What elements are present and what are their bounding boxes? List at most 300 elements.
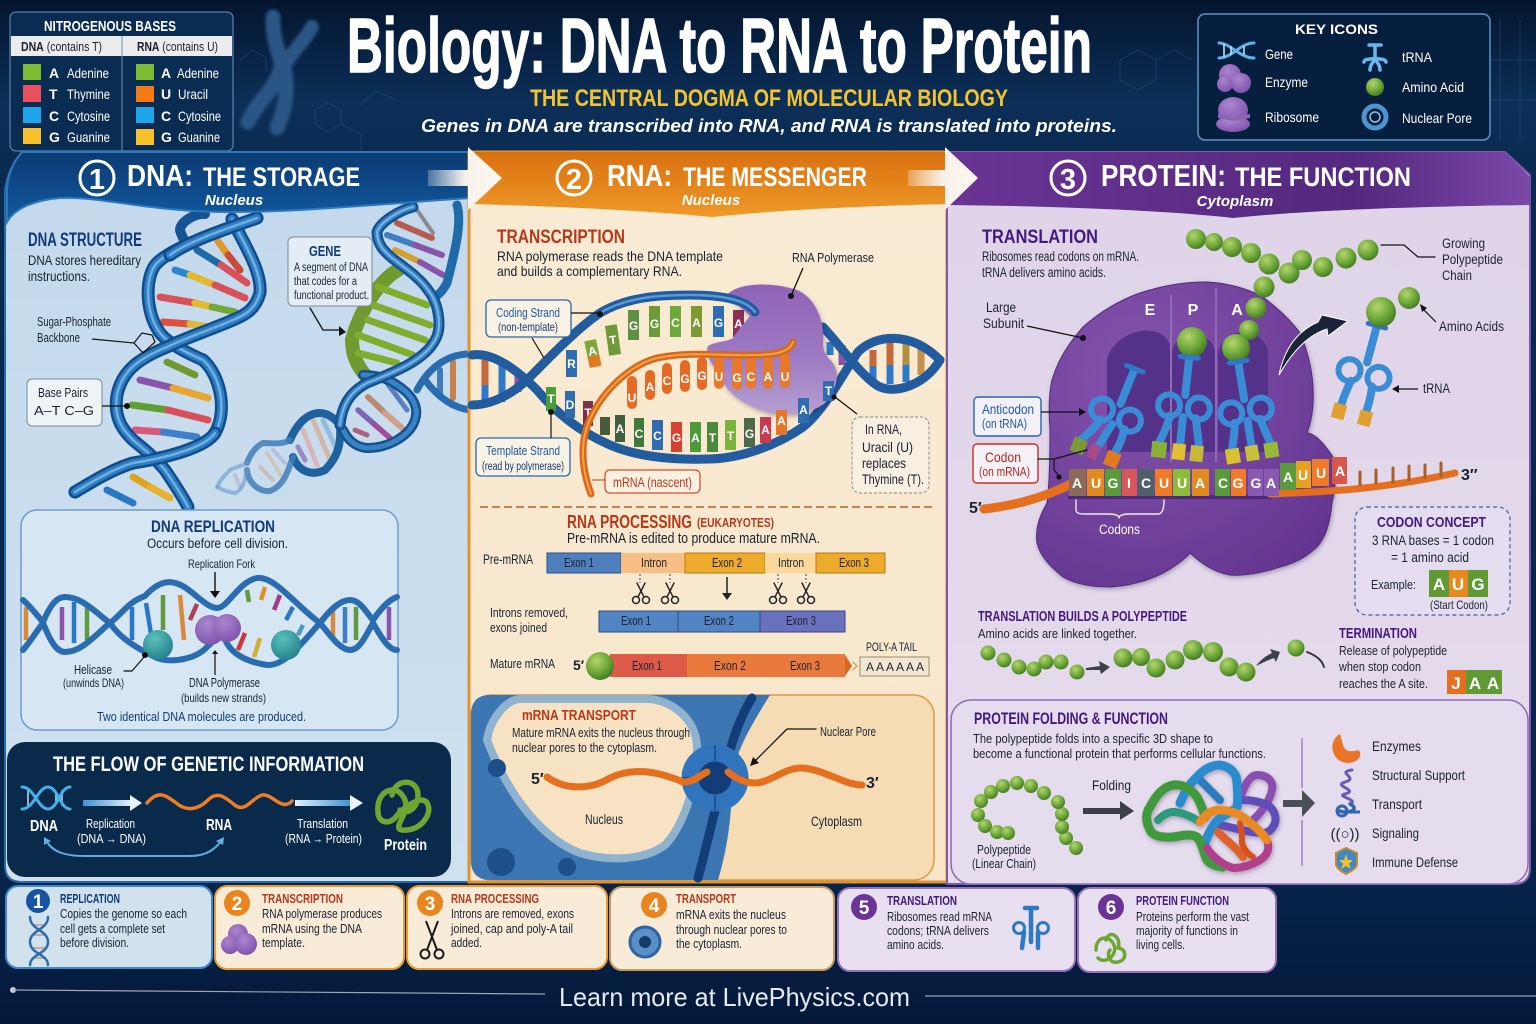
panel: mRNA transport: 5′: [531, 771, 544, 788]
label: growing polypeptide chain: Polypeptide: [1442, 252, 1503, 267]
lower lens strands: [217, 413, 343, 493]
nucleus interior: [487, 699, 697, 858]
card: translation: [838, 888, 1075, 971]
card: replication: Copies the genome so each: [60, 907, 187, 921]
free amino acids: [1366, 287, 1420, 327]
replication labels: Helicase: [74, 663, 112, 677]
card: translation: codons; tRNA delivers: [887, 924, 989, 938]
label: growing polypeptide chain: Growing: [1442, 236, 1485, 251]
callout: uracil replaces thymine: Uracil (U): [862, 439, 913, 455]
header: RNA the messenger: [557, 158, 867, 209]
icon: signaling: ((○)): [1330, 826, 1360, 843]
diagram: joined exons: Exon 2: [704, 614, 734, 628]
nascent RNA bases: U: [781, 370, 789, 384]
subtitle: THE CENTRAL DOGMA OF MOLECULAR BIOLOGY: [530, 85, 1008, 112]
mRNA with codon tiles: A: [1283, 469, 1293, 485]
panel: flow of genetic information: (DNA → DNA): [77, 832, 146, 846]
template strand bases: C: [635, 427, 644, 441]
panel: flow of genetic information: Replication: [86, 817, 135, 831]
panel: protein folding and function: Structural Support: [1372, 767, 1465, 783]
text: translation description: tRNA delivers amino acids.: [982, 265, 1106, 280]
panel: mRNA transport: 3′: [866, 775, 879, 792]
panel: RNA: [469, 152, 947, 882]
callout: template strand: (read by polymerase): [482, 461, 564, 473]
tagline: Genes in DNA are transcribed into RNA, and RNA is translated into proteins.: [421, 115, 1117, 136]
panel: DNA replication: Occurs before cell division.: [147, 536, 288, 551]
folded protein: [1147, 765, 1275, 868]
panel: flow of genetic information: [7, 742, 451, 877]
header: DNA the storage: THE STORAGE: [203, 162, 360, 192]
panel: mRNA transport: nuclear pores to the cytoplasm.: [512, 740, 657, 755]
callout: anticodon: Anticodon: [982, 402, 1034, 417]
text: termination: reaches the A site.: [1339, 676, 1428, 691]
icon: structural support: [1341, 770, 1352, 804]
callout: gene: A segment of DNA: [294, 262, 368, 274]
callout: uracil replaces thymine: In RNA,: [865, 421, 902, 437]
nascent RNA bases: G: [680, 372, 690, 386]
panel: nitrogenous bases: A: [49, 65, 59, 81]
panel: nitrogenous bases: T: [49, 86, 58, 102]
heading: DNA structure: DNA STRUCTURE: [28, 230, 142, 251]
ribosome sites: [1107, 330, 1268, 452]
card: protein function: PROTEIN FUNCTION: [1136, 894, 1229, 908]
strand lens 1: [343, 375, 416, 448]
template strand bases: T: [825, 384, 833, 398]
coding strand bases: G: [629, 319, 638, 333]
text: termination: A: [1469, 674, 1481, 693]
heading: transcription: TRANSCRIPTION: [497, 227, 625, 248]
panel: codon concept: U: [1452, 575, 1464, 594]
icon: DNA: [22, 787, 70, 809]
panel: protein folding and function: Enzymes: [1372, 738, 1421, 754]
mRNA with codon tiles: A: [1266, 475, 1276, 491]
callout: codon: [973, 444, 1087, 483]
nascent RNA bases: G: [732, 371, 742, 385]
panel: protein folding and function: [951, 700, 1528, 884]
nascent RNA bases: [627, 353, 790, 409]
label: RNA polymerase: RNA Polymerase: [792, 250, 874, 265]
diagram: joined exons: Introns removed,: [490, 605, 568, 620]
icon: nuclear pore: [682, 745, 748, 811]
panel: DNA replication: DNA REPLICATION: [151, 517, 275, 536]
panel: nitrogenous bases: Adenine: [67, 65, 109, 81]
mRNA with codon tiles: C: [1218, 475, 1228, 491]
panel 1 header band: [7, 152, 470, 222]
text: transcription description: and builds a complementary RNA.: [497, 263, 682, 279]
twist toward panel 2: [417, 354, 470, 410]
card: transcription: template.: [262, 936, 305, 950]
icon: chromosome: [248, 17, 312, 128]
text: amino acids linked: Amino acids are linked together.: [978, 626, 1137, 641]
card: RNA processing: joined, cap and poly-A tail: [450, 922, 573, 936]
header: DNA the storage: [80, 158, 360, 209]
label: codons bracket: [1076, 500, 1164, 537]
card: transcription: RNA polymerase produces: [262, 907, 382, 921]
card: protein function: living cells.: [1136, 938, 1185, 952]
coding strand bases: T: [608, 332, 618, 347]
diagram: pre-mRNA bar: Intron: [778, 556, 804, 570]
diagram: mature mRNA: Exon 3: [790, 658, 820, 673]
panel: nitrogenous bases: Thymine: [67, 86, 110, 102]
free tRNA: [1326, 319, 1402, 429]
text: transcription description: [497, 248, 723, 279]
panel: nitrogenous bases: DNA (contains T): [21, 39, 102, 54]
mRNA with codon tiles: [969, 457, 1478, 517]
tRNA at E site: [1069, 357, 1159, 471]
icon: immune defense shield: [1336, 848, 1357, 874]
panel: key icons: Enzyme: [1265, 74, 1308, 90]
mRNA with codon tiles: A: [1072, 475, 1082, 491]
decorative molecule lines: [240, 20, 1536, 150]
strand main: [340, 207, 439, 425]
header: DNA the storage: 1: [89, 164, 105, 196]
card: transport: the cytoplasm.: [676, 937, 742, 951]
panel: nitrogenous bases: Cytosine: [178, 108, 221, 124]
panel: codon concept: Example:: [1371, 577, 1416, 592]
diagram: mature mRNA: [490, 642, 929, 680]
coding strand bases: [566, 306, 744, 377]
left and right twist rungs: [485, 342, 921, 402]
heading: RNA processing: RNA PROCESSING: [567, 512, 692, 532]
text: termination: [1338, 626, 1502, 694]
label: large subunit: Subunit: [983, 316, 1024, 331]
nascent mRNA strand: [583, 342, 793, 494]
card: transport: 4: [649, 896, 660, 917]
diagram: mature mRNA: 5′: [573, 657, 585, 673]
panel 3 header band: [947, 152, 1531, 218]
panel: nitrogenous bases: C: [161, 108, 171, 124]
icon: amino acid: [1366, 78, 1384, 96]
replication labels: (unwinds DNA): [63, 676, 124, 690]
label: sugar-phosphate backbone: Sugar-Phosphate: [37, 314, 111, 329]
card: translation: Ribosomes read mRNA: [887, 910, 993, 924]
callout: uracil replaces thymine: replaces: [862, 455, 906, 471]
panel: protein: [947, 152, 1531, 884]
DNA helix left: [75, 214, 260, 507]
linear polypeptide: [971, 776, 1083, 855]
coding strand bases: R: [567, 357, 576, 371]
card: translation: amino acids.: [887, 938, 944, 952]
card: transcription: 2: [232, 894, 242, 915]
panel: flow of genetic information: DNA: [30, 818, 58, 835]
text: termination: TERMINATION: [1339, 626, 1417, 642]
panel: flow of genetic information: THE FLOW OF GENETIC INFORMATION: [53, 753, 364, 776]
panel: flow of genetic information: (RNA → Protein): [285, 832, 362, 846]
panel: nitrogenous bases: [10, 12, 233, 151]
nascent RNA bases: G: [697, 369, 707, 383]
mRNA with codon tiles: I: [1127, 475, 1131, 491]
nascent RNA bases: C: [747, 370, 756, 384]
callout: mRNA nascent: [592, 470, 700, 493]
callout: gene: functional product.: [294, 290, 369, 302]
label: codons bracket: Codons: [1099, 522, 1140, 537]
mRNA with codon tiles: U: [1159, 475, 1169, 491]
icon: nuclear pore: [1364, 106, 1386, 128]
panel: nitrogenous bases: G: [49, 129, 60, 145]
back strand loop: [180, 214, 205, 245]
diagram: mature mRNA: POLY-A TAIL: [866, 642, 917, 654]
panel: nitrogenous bases: G: [161, 129, 172, 145]
label: growing polypeptide chain: Chain: [1442, 268, 1472, 283]
text: termination: A: [1487, 674, 1499, 693]
label: amino acids: [1420, 304, 1504, 334]
callout: coding strand: (non-template): [498, 320, 558, 334]
mRNA with codon tiles: U: [1298, 467, 1308, 483]
callout: base pairs: A–T C–G: [34, 403, 94, 418]
icon: tRNA: [1364, 45, 1386, 70]
callout: uracil replaces thymine: Thymine (T).: [862, 471, 924, 487]
panel: key icons: Ribosome: [1265, 109, 1319, 125]
header: protein the function: PROTEIN:: [1101, 158, 1226, 193]
arrow: translation: [295, 795, 363, 811]
replication labels: [63, 650, 306, 724]
DNA strands: [472, 295, 940, 459]
icon: ribosome: [1216, 97, 1250, 132]
panel: nitrogenous bases: U: [161, 86, 171, 102]
panel: flow of genetic information: RNA: [206, 817, 232, 834]
diagram: pre-mRNA bar: Pre-mRNA: [483, 552, 533, 567]
helicase enzymes: [143, 630, 301, 660]
template strand bases: A: [691, 431, 700, 445]
text: translation description: Ribosomes read codons on mRNA.: [982, 249, 1139, 264]
mRNA with codon tiles: U: [1091, 475, 1101, 491]
mRNA with codon tiles: A: [1335, 463, 1345, 479]
panel: nitrogenous bases: Guanine: [67, 129, 110, 145]
panel 3 body: [947, 152, 1530, 884]
template strand bases: T: [584, 406, 592, 420]
panel: nitrogenous bases: A: [161, 65, 171, 81]
RNA wave: [147, 795, 292, 809]
replication strands: [23, 578, 397, 665]
callout: template strand: Template Strand: [486, 443, 560, 458]
gene section: [352, 270, 398, 378]
template strand bases: T: [727, 429, 735, 443]
diagram: joined exons: exons joined: [490, 620, 547, 635]
DNA helix right with gene: [217, 205, 470, 493]
card: protein function: Proteins perform the vast: [1136, 910, 1249, 924]
mRNA with codon tiles: U: [1177, 475, 1187, 491]
card: transcription: [215, 886, 404, 969]
diagram: mature mRNA: Exon 2: [714, 658, 746, 673]
heading: RNA processing: (EUKARYOTES): [697, 516, 774, 530]
card: translation: TRANSLATION: [887, 894, 957, 908]
icon: transport: [1337, 804, 1360, 816]
callout: gene: [288, 237, 372, 336]
mRNA with codon tiles: U: [1316, 465, 1326, 481]
panel: mRNA transport: Nucleus: [585, 811, 623, 827]
site labels E P A: A: [1231, 302, 1243, 319]
DNA polymerase: [195, 614, 241, 645]
arrow: replication: [83, 795, 142, 811]
diagram: pre-mRNA bar: Exon 2: [712, 556, 742, 570]
nascent RNA bases: C: [663, 374, 672, 388]
card: transport: mRNA exits the nucleus: [676, 908, 786, 922]
diagram: transcription bubble: [472, 285, 940, 494]
title: Biology: DNA to RNA to Protein: [347, 3, 1092, 89]
arrow: RNA to protein: [908, 147, 978, 210]
header: RNA the messenger: THE MESSENGER: [683, 162, 867, 192]
text: DNA structure description: instructions.: [28, 268, 90, 284]
mRNA with codon tiles: 3′′: [1461, 467, 1478, 484]
header: RNA the messenger: Nucleus: [682, 192, 740, 209]
panel: nitrogenous bases: NITROGENOUS BASES: [44, 18, 176, 35]
panel: codon concept: A: [1433, 575, 1445, 594]
text: DNA structure description: DNA stores hereditary: [28, 252, 141, 268]
card: replication: [6, 886, 212, 968]
card: protein function: 6: [1106, 898, 1116, 919]
ribosome body: [1037, 282, 1335, 587]
text: termination: J: [1451, 674, 1461, 693]
panel: protein folding and function: PROTEIN FOLDING & FUNCTION: [974, 710, 1168, 728]
panel 1 body: [5, 152, 472, 882]
panel 2 body: [469, 152, 947, 882]
text: termination: Release of polypeptide: [1339, 643, 1447, 658]
arrow: tRNA exits: [1279, 315, 1348, 375]
template strand bases: A: [761, 423, 770, 437]
footer: Learn more at LivePhysics.com: [559, 982, 910, 1012]
callout: codon: (on mRNA): [979, 464, 1030, 479]
coding strand front of polymerase: [600, 295, 755, 313]
callout: base pairs: Base Pairs: [38, 385, 88, 400]
helix strand 2: [75, 218, 257, 492]
panel: key icons: KEY ICONS: [1295, 21, 1378, 37]
panel: flow of genetic information: Protein: [384, 837, 427, 854]
panel: codon concept: = 1 amino acid: [1391, 550, 1469, 565]
coding strand bases: C: [671, 316, 680, 330]
panel: protein folding and function: The polypeptide folds into a specific 3D shape to: [973, 731, 1213, 746]
card: RNA processing: [407, 886, 607, 969]
nascent RNA bases: U: [628, 391, 636, 405]
callout: mRNA nascent: mRNA (nascent): [613, 475, 692, 490]
arrow: folding: [1083, 801, 1134, 820]
template strand bases: D: [566, 398, 575, 412]
label: sugar-phosphate backbone: Backbone: [37, 330, 80, 345]
header: DNA the storage: DNA:: [127, 158, 193, 193]
mRNA with codon tiles: 5′: [969, 500, 982, 517]
coding strand bases: A: [734, 317, 743, 331]
panel: nitrogenous bases: C: [49, 108, 59, 124]
icon: gene: [1219, 43, 1254, 58]
panel: mRNA transport: Mature mRNA exits the nucleus through: [512, 725, 690, 740]
header: protein the function: THE FUNCTION: [1235, 162, 1411, 192]
label: large subunit: Large: [986, 300, 1016, 315]
divider: [480, 506, 933, 508]
footer: [10, 982, 1536, 1012]
panel: codon concept: 3 RNA bases = 1 codon: [1372, 533, 1494, 548]
card: translation: 5: [859, 898, 870, 919]
panel: codon concept: CODON CONCEPT: [1377, 514, 1486, 531]
template strand bases: [546, 381, 834, 452]
template strand bases: A: [799, 403, 808, 417]
label: tRNA: [1392, 381, 1450, 396]
arrow: to functions: [1283, 790, 1315, 817]
site labels E P A: E: [1145, 302, 1156, 319]
panel: protein folding and function: Folding: [1092, 777, 1131, 793]
panel: nitrogenous bases: RNA (contains U): [137, 39, 218, 54]
site labels E P A: P: [1188, 302, 1199, 319]
panel: mRNA transport: Nuclear Pore: [820, 724, 876, 739]
diagram: pre-mRNA bar: [483, 552, 885, 573]
template strand bases: G: [745, 427, 754, 441]
header: protein the function: Cytoplasm: [1197, 193, 1273, 210]
mRNA with codon tiles: G: [1233, 475, 1244, 491]
diagram: joined exons: Exon 3: [786, 614, 816, 628]
panel: codon concept: (Start Codon): [1430, 598, 1488, 612]
card: RNA processing: RNA PROCESSING: [451, 892, 539, 906]
coding strand bases: G: [714, 316, 723, 330]
card: protein function: [1078, 888, 1276, 972]
panel: protein folding and function: Immune Defense: [1372, 854, 1458, 870]
growing polypeptide chain: [1177, 229, 1378, 362]
nascent RNA bases: A: [764, 370, 773, 384]
ribosome: [1037, 282, 1335, 587]
card: replication: cell gets a complete set: [60, 922, 165, 936]
callout: uracil replaces thymine: [831, 394, 929, 493]
upper rungs: [387, 207, 443, 275]
panel: protein folding and function: become a functional protein that performs cellular functions.: [973, 746, 1266, 761]
icon: enzymes: [1332, 734, 1360, 763]
panel: DNA: [5, 152, 472, 882]
panel: nitrogenous bases: Cytosine: [67, 108, 110, 124]
diagram: pre-mRNA bar: Exon 1: [564, 556, 594, 570]
text: RNA processing description: Pre-mRNA is edited to produce mature mRNA.: [567, 531, 820, 547]
helix strand 2 front pieces: [75, 218, 257, 492]
card: transcription: TRANSCRIPTION: [262, 892, 343, 906]
panel: DNA replication: [21, 510, 398, 730]
callout: coding strand: [486, 300, 603, 358]
replication labels: Two identical DNA molecules are produced.: [97, 709, 306, 724]
template strand bases: A: [777, 414, 786, 428]
card: transcription: mRNA using the DNA: [262, 922, 363, 936]
helix strand 1: [116, 219, 260, 507]
nascent RNA bases: U: [715, 370, 723, 384]
nascent RNA bases: A: [646, 380, 655, 394]
label: amino acids: Amino Acids: [1439, 319, 1504, 334]
text: termination: when stop codon: [1338, 659, 1421, 674]
panel 2 header band: [469, 152, 947, 217]
label: RNA polymerase: [788, 250, 874, 299]
callout: anticodon: [974, 397, 1086, 436]
panel: key icons: [1198, 14, 1490, 140]
callout: anticodon: (on tRNA): [982, 416, 1027, 431]
callout: gene: GENE: [309, 243, 341, 260]
mRNA with codon tiles: C: [1141, 475, 1151, 491]
replication rungs: [26, 587, 389, 657]
heading: translation builds a polypeptide: TRANSLATION BUILDS A POLYPEPTIDE: [978, 609, 1187, 625]
card: transport: TRANSPORT: [676, 892, 736, 906]
coding strand bases: A: [587, 343, 598, 359]
panel: nitrogenous bases: Adenine: [177, 65, 219, 81]
coding strand bases: G: [650, 317, 659, 331]
template strand bases: T: [709, 431, 717, 445]
back strand upper: [432, 205, 459, 298]
membrane dark stripe: [698, 698, 752, 878]
callout: template strand: [476, 409, 570, 476]
diagram: pre-mRNA bar: Exon 3: [839, 556, 869, 570]
label: sugar-phosphate backbone: [37, 314, 155, 353]
mRNA through pore: [547, 768, 862, 787]
card: transport: [610, 887, 834, 970]
panel: key icons: Gene: [1265, 46, 1293, 62]
nuclear membrane: [471, 695, 770, 880]
header: RNA the messenger: RNA:: [607, 158, 672, 193]
callout: coding strand: Coding Strand: [496, 305, 560, 320]
chain: polypeptide growth: [980, 640, 1324, 682]
panel: protein folding and function: Polypeptide: [977, 843, 1031, 857]
diagram: mature mRNA: Exon 1: [632, 658, 662, 673]
label: growing polypeptide chain: [1381, 236, 1503, 283]
card: replication: before division.: [60, 936, 129, 950]
